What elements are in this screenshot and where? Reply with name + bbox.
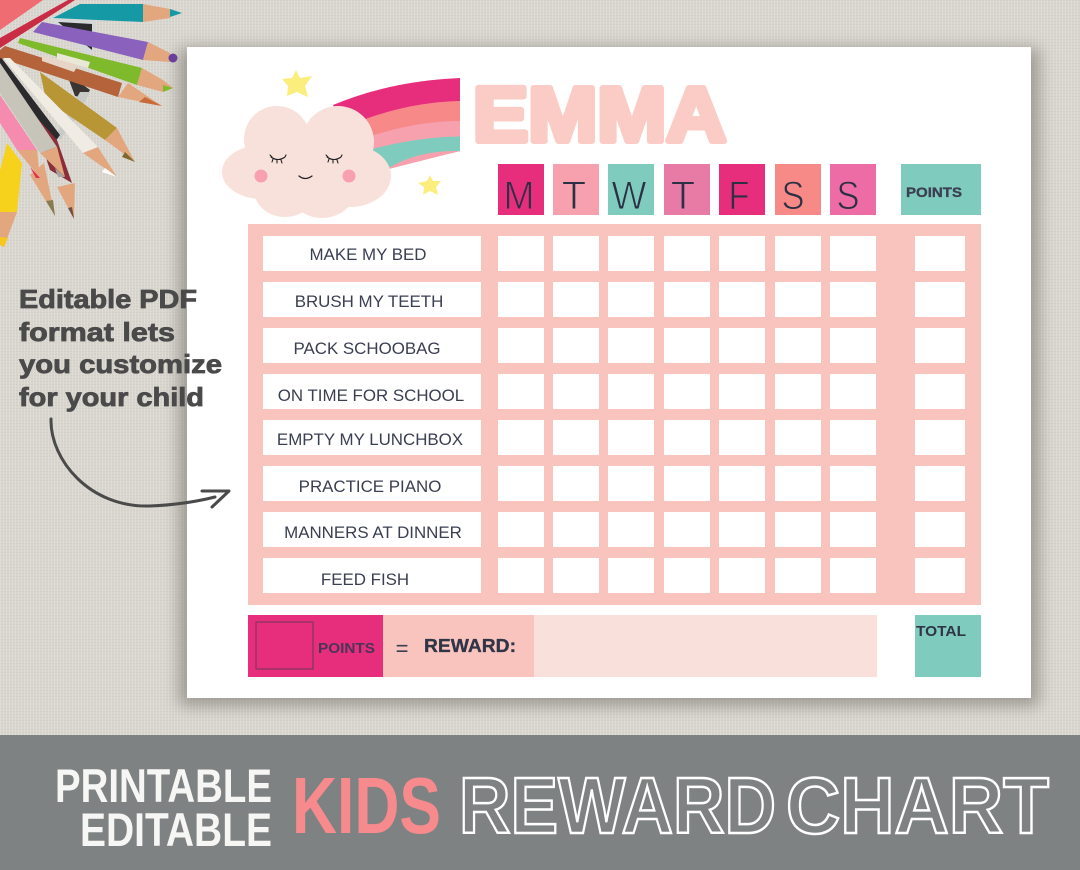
chore labels: MAKE MY BED: [309, 245, 427, 264]
REWARD CHART outline: [459, 761, 1049, 850]
icon: colored pencils: [0, 0, 182, 247]
panel: chart paper: [187, 47, 1031, 698]
icon: star: [418, 175, 441, 195]
chore labels: PACK SCHOOBAG: [293, 339, 441, 358]
panel: chore grid: [248, 224, 981, 605]
points header: [901, 164, 981, 215]
icon: rainbow: [333, 78, 460, 170]
day headers: W: [612, 174, 647, 218]
total box: [915, 615, 981, 677]
callout: editable PDF note: format lets: [19, 317, 175, 347]
callout: editable PDF note: [19, 284, 222, 412]
KIDS: KIDS: [292, 761, 441, 850]
day headers: T: [671, 174, 695, 218]
chore rows: [263, 236, 481, 593]
chore labels: BRUSH MY TEETH: [295, 292, 443, 311]
icon: star: [282, 70, 312, 97]
reward bar: REWARD:: [424, 636, 516, 656]
chore labels: EMPTY MY LUNCHBOX: [277, 430, 463, 449]
chore labels: [277, 245, 464, 589]
paper shadow: [179, 48, 1039, 706]
chore labels: FEED FISH: [321, 570, 409, 589]
icon: cloud face: [222, 106, 391, 218]
points header: POINTS: [906, 184, 962, 200]
REWARD CHART outline: CHART: [786, 761, 1049, 850]
chore labels: ON TIME FOR SCHOOL: [278, 386, 464, 405]
total box: TOTAL: [916, 623, 966, 640]
day headers: M: [504, 174, 534, 218]
reward bar: =: [396, 636, 408, 661]
reward bar: [248, 615, 877, 677]
callout: editable PDF note: you customize: [19, 349, 222, 379]
callout: editable PDF note: Editable PDF: [19, 284, 197, 314]
REWARD CHART outline: REWARD: [459, 761, 776, 850]
title: EMMA: EMMA: [473, 72, 726, 158]
chore labels: MANNERS AT DINNER: [284, 523, 462, 542]
callout: editable PDF note: for your child: [19, 382, 204, 412]
day headers: [498, 164, 876, 218]
footer banner: [0, 735, 1080, 870]
chore labels: PRACTICE PIANO: [299, 477, 441, 496]
day headers: T: [562, 174, 586, 218]
arrow: [51, 419, 229, 507]
printable editable text: PRINTABLE: [55, 759, 272, 812]
printable editable text: EDITABLE: [80, 803, 272, 856]
checkbox cells: [498, 236, 965, 593]
day headers: S: [836, 174, 860, 218]
day headers: S: [782, 174, 804, 218]
printable editable text: [55, 759, 272, 856]
reward bar: POINTS: [318, 641, 375, 657]
day headers: F: [728, 174, 750, 218]
